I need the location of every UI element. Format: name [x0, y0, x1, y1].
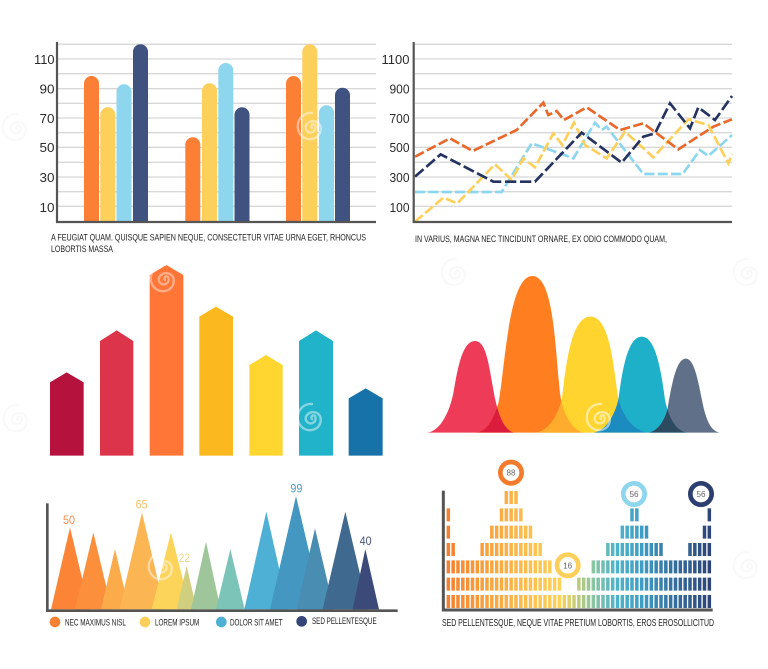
orange bars [84, 76, 301, 222]
panel: bell curves [427, 276, 719, 433]
y axis labels: 30 [40, 170, 54, 185]
y axis labels: 900 [390, 82, 410, 96]
y axis labels: 90 [40, 82, 54, 96]
legend [50, 616, 377, 628]
y axis labels: 1100 [382, 52, 410, 67]
badge: 16: 16 [563, 561, 573, 570]
y axis labels: 100 [390, 200, 410, 215]
y axis labels: 300 [390, 170, 410, 185]
legend: SED PELLENTESQUE [312, 616, 377, 626]
overlaps [477, 399, 686, 432]
bell: slate [648, 359, 719, 433]
badge: 56 navy: 56 [696, 490, 706, 499]
caption: bar chart [51, 232, 366, 255]
panel: segmented column chart [443, 462, 713, 610]
value labels: 50 [63, 513, 75, 527]
value labels: 22 [179, 551, 190, 565]
y axis labels: 110 [34, 52, 54, 67]
badge: 16 [557, 555, 578, 576]
value labels: 99 [290, 481, 303, 495]
legend: NEC MAXIMUS NISL [65, 618, 126, 628]
yellow bars [100, 44, 317, 222]
badge: 56 light blue: 56 [629, 490, 639, 499]
y axis labels: 500 [390, 140, 410, 155]
value labels [63, 481, 372, 565]
bell: yellow [537, 317, 648, 433]
caption: line chart: IN VARIUS, MAGNA NEC TINCIDUNT ORNARE, EX ODIO COMMODO QUAM, [415, 234, 667, 245]
dashed data lines [415, 96, 732, 222]
y axis labels: 70 [40, 111, 54, 126]
y axis labels: 50 [40, 140, 54, 155]
bell: orange [475, 276, 584, 433]
badge: 88 [500, 462, 522, 483]
legend: DOLOR SIT AMET [230, 618, 283, 628]
light blue bars [116, 63, 334, 222]
watermark spirals [3, 113, 757, 579]
y axis labels: 10 [40, 200, 54, 215]
axes [414, 42, 732, 222]
panel: grouped bar chart [34, 42, 376, 222]
caption: bar chart: LOBORTIS MASSA [51, 244, 113, 255]
badge: 88: 88 [506, 469, 516, 478]
y axis labels [382, 52, 410, 215]
axes [57, 42, 376, 222]
badge: 56 light blue [623, 483, 645, 505]
legend: LOREM IPSUM [155, 618, 199, 628]
badge: 56 navy [690, 483, 712, 505]
axes [443, 491, 713, 610]
panel: line chart [382, 42, 732, 222]
caption: bar chart: A FEUGIAT QUAM. QUISQUE SAPIEN NEQUE, CONSECTETUR VITAE URNA EGET, RHONCUS [51, 232, 366, 244]
bell: red [427, 341, 514, 433]
columns [448, 491, 709, 608]
triangles [51, 496, 379, 609]
y axis labels [34, 52, 54, 215]
panel: triangle chart [47, 481, 398, 628]
y axis labels: 700 [390, 111, 410, 126]
bell: teal [593, 337, 687, 433]
value labels: 40 [360, 534, 372, 548]
navy bars [133, 44, 350, 222]
value labels: 65 [136, 497, 148, 511]
axes [47, 503, 398, 611]
panel: arrow bars [50, 265, 383, 456]
